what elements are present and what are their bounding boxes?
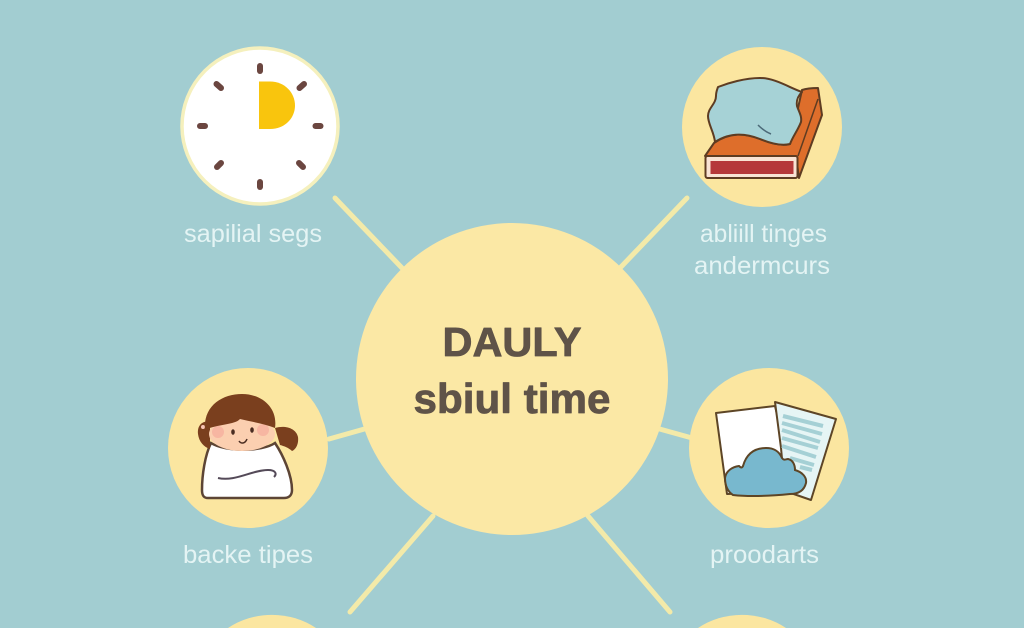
icon: clock ticks [200,66,320,187]
icon: girl body [202,443,292,498]
icon: girl face [209,417,275,451]
icon: orange book base [705,88,822,178]
icon: book spine [706,156,798,178]
central hub [356,223,668,535]
node: documents [689,368,849,569]
label: abliill tinges andermcurs: abliill tinges [700,220,827,248]
node: clock [182,48,338,248]
node: bottom right circle [698,615,786,628]
node: pillow book [682,47,842,280]
node: girl [168,368,328,569]
label: backe tipes: backe tipes [183,541,313,569]
icon: eyes and mouth [231,427,254,443]
icon: arm line [218,470,276,479]
label: abliill tinges andermcurs [694,220,830,280]
connector lines [329,198,692,612]
hub title: sbiul time [414,375,610,422]
hub title: DAULY [442,319,582,365]
hub title [414,319,610,422]
icon: white sheet [716,406,795,494]
icon: pigtails [198,422,210,449]
icon: hair [205,394,275,430]
label: sapilial segs: sapilial segs [184,220,322,248]
icon: cloud [725,448,806,496]
label: abliill tinges andermcurs: andermcurs [694,252,830,280]
icon: text sheet [775,402,836,500]
icon: pale blue pillow [708,78,802,145]
icon: text lines [782,416,823,470]
node: bottom left circle [228,615,316,628]
icon: yellow half sun [259,82,295,129]
label: proodarts: proodarts [710,541,819,569]
